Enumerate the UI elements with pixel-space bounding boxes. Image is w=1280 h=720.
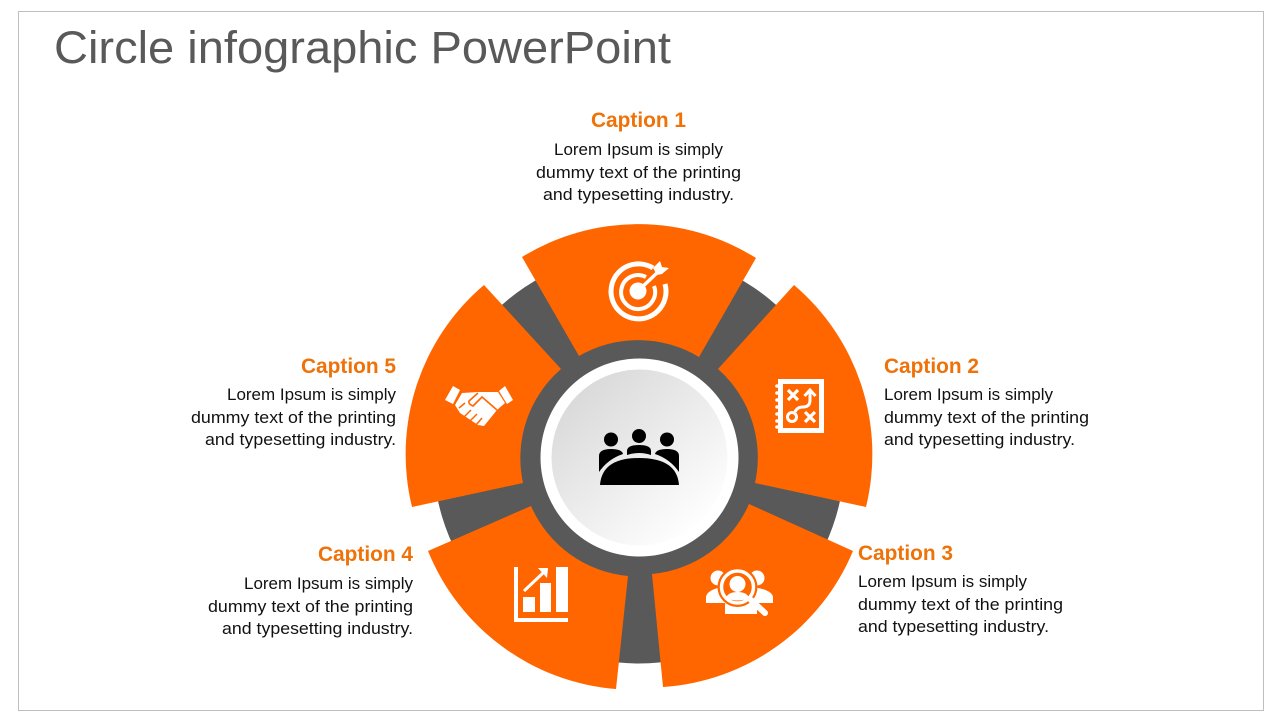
caption 1 (536, 109, 741, 204)
caption 2: dummy text of the printing (884, 408, 1089, 427)
caption 4: Lorem Ipsum is simply (244, 574, 413, 593)
circle diagram (406, 224, 872, 689)
icon: people search (706, 567, 773, 614)
caption 5: and typesetting industry. (205, 430, 396, 449)
caption 2 (884, 355, 1089, 449)
caption 2: and typesetting industry. (884, 430, 1075, 449)
caption 3: dummy text of the printing (858, 595, 1063, 614)
segment 1 (522, 224, 756, 357)
segment 3 (652, 504, 853, 687)
caption 1: Caption 1 (591, 109, 686, 132)
caption 5: Lorem Ipsum is simply (227, 385, 396, 404)
title: Circle infographic PowerPoint (54, 22, 672, 73)
caption 5 (191, 355, 396, 449)
caption 1: Lorem Ipsum is simply (554, 140, 723, 159)
caption 1: and typesetting industry. (543, 185, 734, 204)
icon: growth chart (514, 567, 568, 622)
icon: handshake (445, 386, 513, 426)
icon: target (611, 261, 669, 319)
caption 1: dummy text of the printing (536, 163, 741, 182)
caption 4 (208, 543, 413, 638)
segment 4 (428, 506, 628, 689)
caption 4: dummy text of the printing (208, 597, 413, 616)
segment 5 (406, 285, 561, 507)
icon: strategy map (775, 382, 822, 430)
caption 2: Caption 2 (884, 355, 979, 378)
caption 2: Lorem Ipsum is simply (884, 385, 1053, 404)
caption 4: Caption 4 (318, 543, 413, 566)
caption 3: Caption 3 (858, 542, 953, 565)
caption 3: and typesetting industry. (858, 617, 1049, 636)
segment 2 (718, 285, 872, 507)
caption 5: Caption 5 (301, 355, 396, 378)
icon: meeting table (599, 429, 679, 485)
caption 3 (858, 542, 1063, 636)
caption 5: dummy text of the printing (191, 408, 396, 427)
caption 4: and typesetting industry. (222, 619, 413, 638)
dark base ring (434, 252, 844, 664)
center circle (540, 358, 738, 556)
caption 3: Lorem Ipsum is simply (858, 572, 1027, 591)
